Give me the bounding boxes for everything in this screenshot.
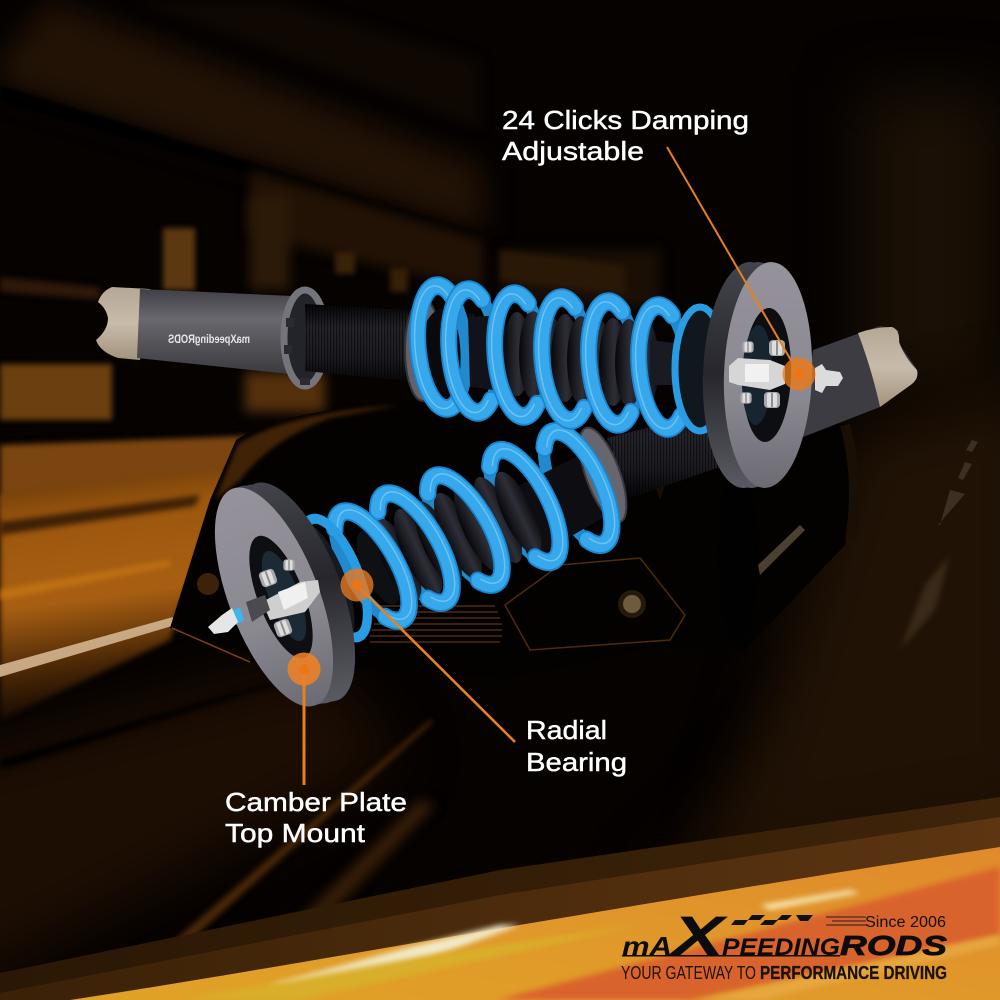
coilover: rear shock (lower assembly)	[190, 326, 917, 721]
logo on body: maXpeedingRODS	[168, 334, 250, 346]
label: radial bearing	[526, 715, 627, 777]
inner thread behind first ring	[420, 308, 470, 392]
label: radial bearing: Bearing	[526, 747, 627, 777]
car silhouette	[170, 400, 854, 678]
lower threaded tube	[607, 408, 725, 500]
lower coil back	[326, 448, 587, 622]
lower spring seat cup	[276, 513, 368, 653]
label: camber plate top mount: Camber Plate	[225, 787, 407, 817]
adjuster collar	[284, 290, 326, 386]
camber plate: upper	[699, 261, 816, 489]
lower perch collar	[405, 299, 441, 401]
label: camber plate top mount	[225, 787, 407, 848]
label: camber plate top mount: Top Mount	[225, 818, 366, 848]
upper top-mount hardware	[729, 340, 843, 408]
logo wordmark	[622, 904, 947, 967]
logo tagline: YOUR GATEWAY TO	[621, 963, 756, 983]
brand logo	[621, 904, 947, 983]
bump stop and bellows	[468, 311, 690, 408]
coilover: front shock (upper assembly)	[96, 261, 843, 489]
lower blue spring	[298, 421, 628, 642]
logo checker flag	[731, 915, 813, 925]
logo wordmark: mA	[622, 931, 672, 961]
label: radial bearing: Radial	[526, 715, 607, 745]
lower collar	[570, 422, 636, 528]
upper spring seat	[675, 307, 725, 431]
spring back	[451, 294, 691, 416]
callout: radial bearing marker and leader	[340, 568, 515, 742]
grey shock body	[137, 289, 292, 374]
lower shock body and end cap	[803, 326, 917, 437]
logo since 2006: Since 2006	[865, 914, 946, 931]
label: 24 clicks damping adjustable: Adjustable	[502, 136, 644, 166]
threaded tube	[305, 304, 475, 387]
logo wordmark: X	[668, 904, 729, 967]
label: 24 clicks damping adjustable: 24 Clicks Damping	[502, 105, 749, 135]
logo tagline	[621, 963, 947, 983]
bottom orange swoosh band	[0, 797, 1000, 1000]
logo wordmark: RODS	[840, 930, 947, 961]
callout: camber plate marker and leader	[288, 652, 320, 785]
callout: damping adjuster marker and leader	[667, 147, 816, 390]
end cap	[96, 287, 150, 360]
label: 24 clicks damping adjustable	[502, 105, 749, 166]
camber plate: lower	[190, 468, 380, 721]
logo wordmark: PEEDING	[722, 934, 840, 961]
lower bellows	[348, 440, 625, 610]
logo tagline: PERFORMANCE DRIVING	[760, 963, 947, 983]
logo speed lines	[826, 917, 866, 925]
blue spring	[410, 284, 682, 431]
lower top-mount hardware	[208, 559, 320, 638]
